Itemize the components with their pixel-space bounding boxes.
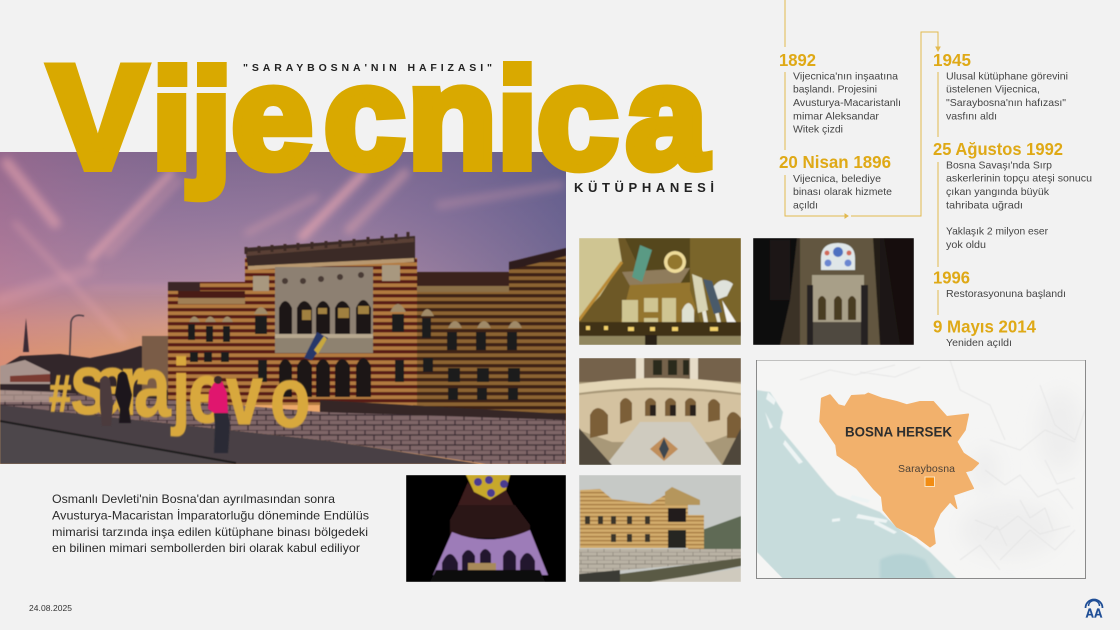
event 20 Nisan 1896: binası olarak hizmete [793, 186, 892, 198]
event 20 Nisan 1896: açıldı [793, 200, 818, 212]
event 20 Nisan 1896: 20 Nisan 1896 [779, 152, 891, 172]
description paragraph: Avusturya-Macaristan İmparatorluğu döneminde Endülüs [52, 508, 369, 522]
flag [304, 332, 328, 360]
upper wall behind sign [319, 400, 566, 421]
event 1945: vasfını aldı [946, 110, 997, 122]
road and pavement [0, 405, 480, 464]
title: Vijecnica: Vijecnica [49, 36, 709, 198]
event 1892: 1892 [779, 50, 816, 70]
city marker [925, 477, 934, 486]
subtitle: KÜTÜPHANESİ [574, 180, 714, 195]
photo: ornate interior with chandelier [579, 238, 741, 345]
photo: building exterior by the river [579, 475, 741, 582]
event 9 Mayıs 2014 [933, 317, 1036, 349]
side windows [188, 314, 520, 400]
event 1945: Ulusal kütüphane görevini [946, 70, 1068, 82]
city label: Saraybosna [898, 463, 955, 475]
event 1892: mimar Aleksandar [793, 110, 880, 122]
event 1945: "Saraybosna'nın hafızası" [946, 97, 1066, 109]
event 25 Ağustos 1992: 25 Ağustos 1992 [933, 139, 1063, 159]
event 25 Ağustos 1992 [933, 139, 1092, 251]
event 25 Ağustos 1992: Yaklaşık 2 milyon eser [946, 226, 1048, 238]
logo: AA [1086, 600, 1103, 620]
description paragraph: mimarisi tarzında inşa edilen kütüphane binası bölgedeki [52, 525, 368, 539]
map: Bosnia and Herzegovina [756, 360, 1086, 579]
event 25 Ağustos 1992: askerlerinin topçu ateşi sonucu [946, 173, 1092, 185]
description paragraph: en bilinen mimari sembollerden biri olarak kabul ediliyor [52, 541, 360, 555]
right wing [413, 280, 566, 415]
sign: #sarajevo: # [49, 364, 71, 422]
event 1892: Avusturya-Macaristanlı [793, 97, 901, 109]
logo: AA: AA [1086, 606, 1103, 620]
event 1945 [933, 50, 1068, 122]
event 1996 [933, 268, 1066, 300]
event 1945: üstelenen Vijecnica, [946, 84, 1040, 96]
event 20 Nisan 1896: Vijecnica, belediye [793, 173, 881, 185]
event 1945: 1945 [933, 50, 971, 70]
left wing [168, 282, 245, 407]
people [100, 372, 230, 453]
main photo: Vijecnica at sunset [0, 152, 566, 464]
description paragraph: Osmanlı Devleti'nin Bosna'dan ayrılmasından sonra [52, 492, 335, 506]
event 20 Nisan 1896 [779, 152, 892, 212]
timeline right column [933, 50, 1092, 349]
map border [756, 360, 1086, 578]
sea [756, 390, 957, 579]
event 1892: Vijecnica'nın inşaatına [793, 70, 898, 82]
timeline left column [779, 50, 901, 212]
event 9 Mayıs 2014: 9 Mayıs 2014 [933, 317, 1036, 337]
terrain relief [800, 360, 1085, 570]
stone wall [0, 390, 566, 464]
event 1892: başlandı. Projesini [793, 84, 877, 96]
upper arches [279, 300, 371, 334]
event 1892: Witek çizdi [793, 124, 843, 136]
sign: #sarajevo: sarajevo [70, 337, 310, 445]
event 1892 [779, 50, 901, 136]
country label: BOSNA HERSEK [845, 424, 952, 440]
event 1996: 1996 [933, 268, 970, 288]
date: 24.08.2025 [29, 603, 72, 613]
central block [245, 258, 417, 405]
timeline connector lines [785, 0, 940, 315]
photo: illuminated concert hall [406, 475, 566, 582]
photo: atrium seen from above [579, 358, 741, 465]
tagline: "SARAYBOSNA'NIN HAFIZASI" [243, 62, 492, 74]
photo: stained glass hall [753, 238, 914, 345]
event 9 Mayıs 2014: Yeniden açıldı [946, 337, 1012, 349]
event 25 Ağustos 1992: tahribata uğradı [946, 199, 1023, 211]
event 25 Ağustos 1992: yok oldu [946, 239, 986, 251]
event 25 Ağustos 1992: Bosna Savaşı'nda Sırp [946, 159, 1052, 171]
event 1996: Restorasyonuna başlandı [946, 288, 1066, 300]
event 25 Ağustos 1992: çıkan yangında büyük [946, 186, 1050, 198]
lower arches [279, 358, 371, 397]
description paragraph [52, 492, 369, 555]
country shape [820, 393, 978, 547]
